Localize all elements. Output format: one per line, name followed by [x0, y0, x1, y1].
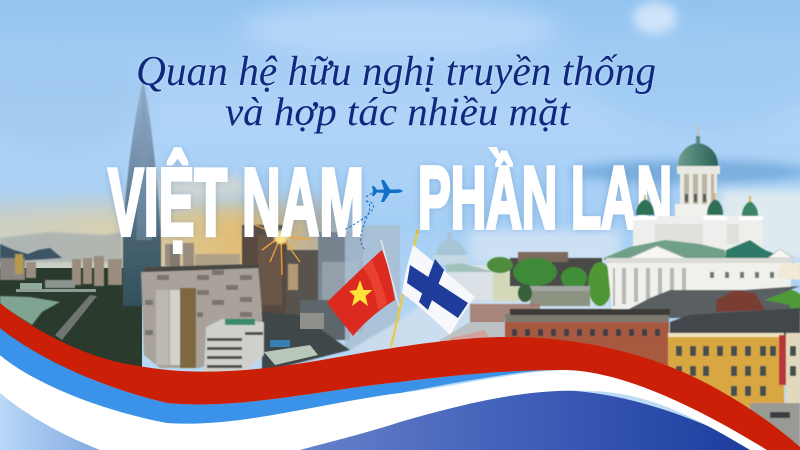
- title: VIỆT NAM: VIỆT NAM: [108, 148, 364, 256]
- foreground small building: [204, 319, 264, 372]
- flag: Finland: [391, 228, 475, 347]
- road: [55, 295, 97, 340]
- heading: script title: Quan hệ hữu nghị truyền thống: [136, 49, 656, 95]
- riverbank: [0, 268, 142, 378]
- tower: [123, 78, 161, 306]
- heading: script title: và hợp tác nhiều mặt: [225, 89, 571, 134]
- small dome building: [433, 232, 519, 301]
- heading: script title: [136, 49, 656, 134]
- wave: bottom fill left: [0, 380, 110, 450]
- side domes: [636, 193, 758, 216]
- photo: Helsinki Cathedral: [505, 124, 800, 450]
- green roofs: [604, 240, 727, 260]
- right dark towers: [170, 225, 400, 350]
- distant hills: [0, 232, 122, 262]
- foreground large building: [141, 264, 262, 368]
- portico: [606, 258, 792, 312]
- icon: airplane and dashed route: [344, 180, 403, 250]
- sun flare: [255, 222, 312, 275]
- yellow building: [668, 333, 800, 408]
- photo: Helsinki background: [350, 160, 800, 360]
- title: VIỆT NAM: [108, 148, 364, 256]
- cathedral drum and dome: [675, 124, 721, 222]
- foreground grey roofs: [627, 286, 800, 318]
- title: VIỆT NAM: VIỆT NAM: [108, 148, 364, 256]
- wave: bottom fill navy: [280, 390, 760, 450]
- photo: Vietnam skyline: [0, 78, 400, 378]
- mid roofs: [470, 304, 540, 340]
- wave: blue stripe: [0, 328, 560, 424]
- cathedral body: [633, 216, 763, 252]
- flag: Vietnam: [327, 240, 400, 336]
- trees at right: [765, 289, 800, 319]
- midrise skyline: [0, 243, 240, 288]
- harbour: [750, 403, 800, 450]
- title: PHẦN LAN: [418, 148, 672, 247]
- foreground parking and roofs: [262, 312, 350, 372]
- heading: script title: Quan hệ hữu nghị truyền thống: [136, 49, 656, 95]
- brick building: [505, 309, 670, 368]
- fading skyline: [350, 262, 620, 360]
- wave: red stripe: [0, 303, 800, 450]
- river water: [0, 296, 60, 325]
- wave: white stripe: [0, 355, 767, 450]
- dark blocks and trees: [487, 252, 612, 306]
